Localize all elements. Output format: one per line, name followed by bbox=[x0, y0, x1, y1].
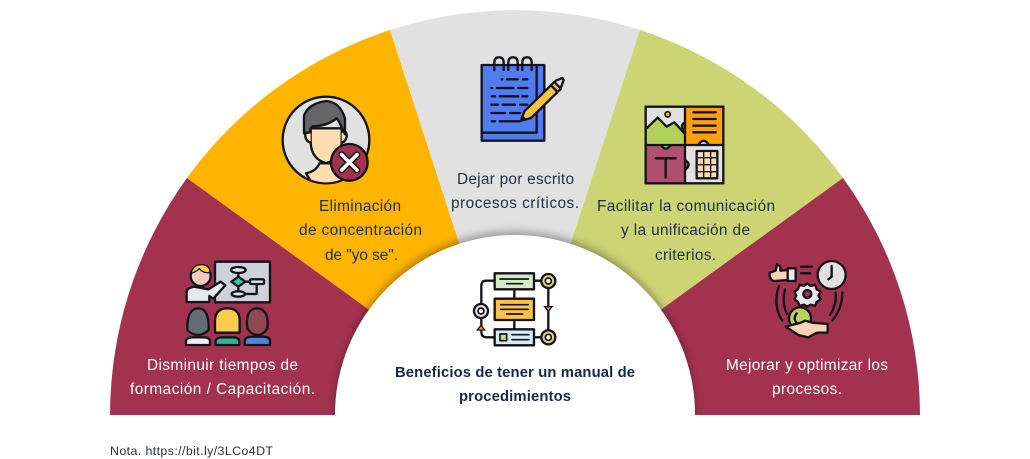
icon: training presentation bbox=[186, 262, 270, 345]
heading: beneficios bbox=[395, 365, 635, 405]
icon: flowchart bbox=[474, 273, 555, 345]
text: eliminacion: Eliminación bbox=[319, 198, 401, 215]
center semicircle bbox=[335, 235, 695, 415]
panel: eliminacion yo se: de "yo se". bbox=[325, 247, 398, 264]
panel: disminuir tiempos bbox=[110, 178, 369, 415]
icon: notepad and pencil bbox=[482, 57, 564, 141]
icon: puzzle bbox=[646, 107, 723, 183]
panel: facilitar comunicacion bbox=[571, 30, 843, 310]
panel: dejar por escrito: procesos críticos. bbox=[451, 195, 579, 212]
panel: disminuir tiempos: formación / Capacitación. bbox=[130, 381, 315, 398]
panel: eliminacion yo se bbox=[187, 30, 459, 310]
source note: Nota. https://bit.ly/3LCo4DT bbox=[110, 444, 273, 458]
panel: facilitar comunicacion: criterios. bbox=[655, 247, 716, 264]
panel: dejar por escrito bbox=[390, 10, 640, 244]
text: facilitar comunicacion: Facilitar la comunicación bbox=[597, 198, 775, 215]
center shadow glow bbox=[335, 231, 695, 425]
icon: process improvement bbox=[770, 261, 846, 337]
panel: mejorar procesos bbox=[661, 178, 920, 415]
icon: person with cross bbox=[283, 97, 369, 185]
heading: beneficios: procedimientos bbox=[459, 389, 571, 405]
text: dejar por escrito: Dejar por escrito bbox=[457, 171, 574, 188]
text: disminuir tiempos: Disminuir tiempos de bbox=[147, 357, 298, 374]
panel: eliminacion yo se: de concentración bbox=[299, 222, 422, 239]
semicircular infographic bbox=[110, 10, 920, 458]
text: mejorar procesos: Mejorar y optimizar los bbox=[726, 357, 888, 374]
panel: facilitar comunicacion: y la unificación de bbox=[621, 222, 750, 239]
panel: mejorar procesos: procesos. bbox=[772, 381, 842, 398]
heading: beneficios: Beneficios de tener un manual de bbox=[395, 365, 635, 381]
